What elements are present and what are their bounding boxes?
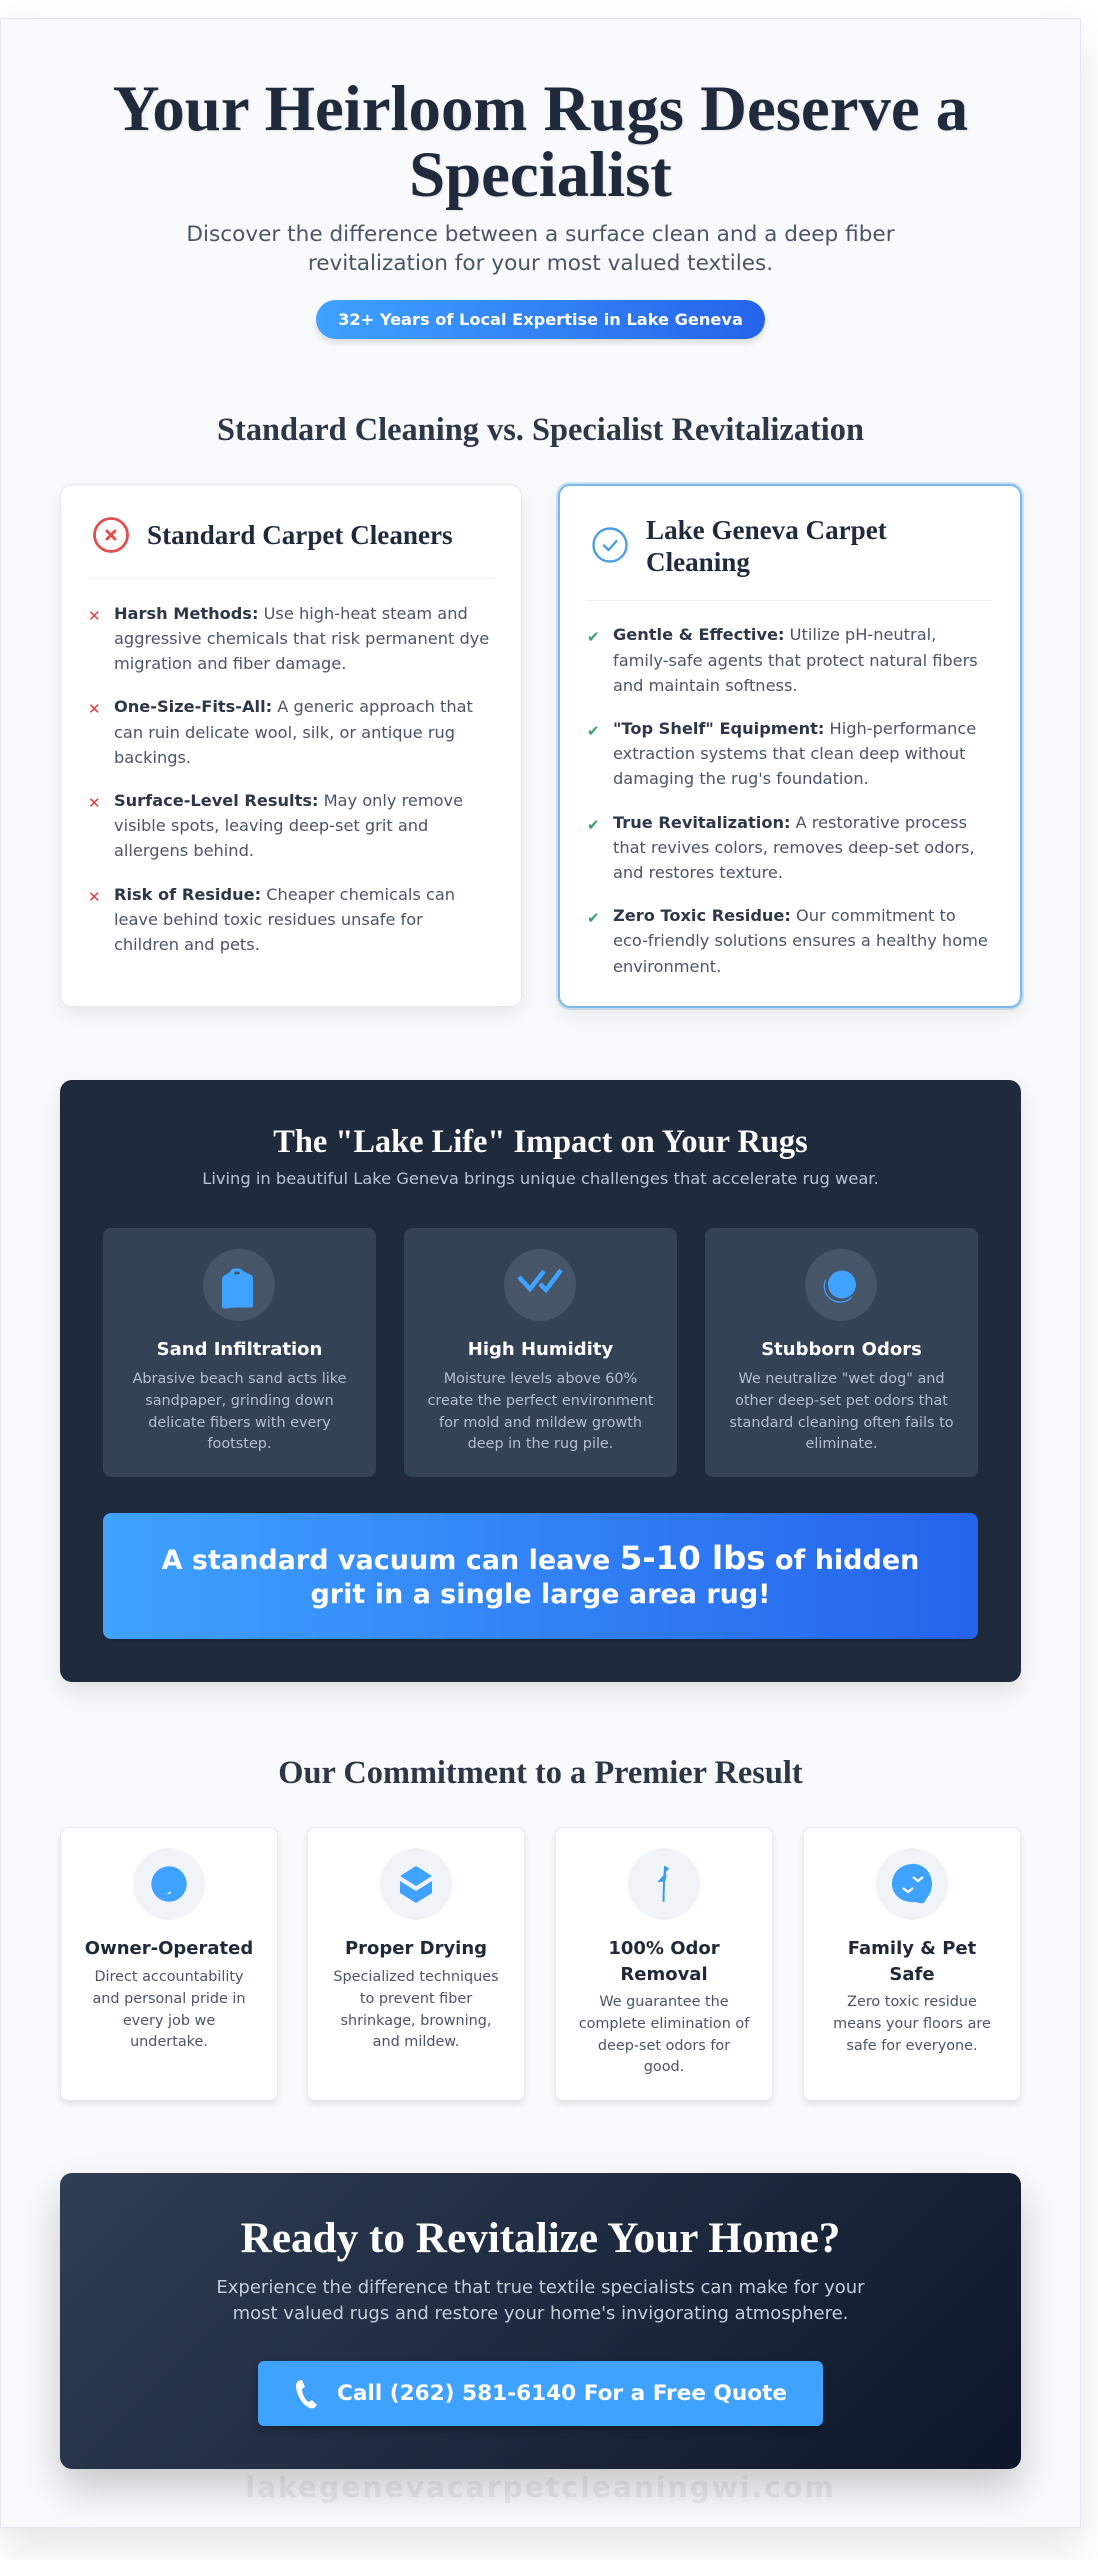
card text: Specialized techniques <box>333 1969 499 1985</box>
callout: hidden grit: grit in a single large area rug! <box>310 1579 770 1610</box>
card text <box>579 1994 750 2075</box>
item: top shelf equipment: extraction systems that clean deep without <box>613 744 966 763</box>
item: surface level results <box>88 791 463 860</box>
item: surface level results: allergens behind. <box>114 841 254 860</box>
item: surface level results: visible spots, leaving deep-set grit and <box>114 816 428 835</box>
card: proper drying <box>307 1827 525 2101</box>
title: Your Heirloom Rugs Deserve a <box>113 73 968 145</box>
badge: years of expertise: 32+ Years of Local Expertise in Lake Geneva <box>338 310 743 329</box>
card heading: Stubborn Odors <box>761 1339 922 1360</box>
card heading <box>608 1938 720 1985</box>
card text: and mildew. <box>373 2034 459 2050</box>
card text: We neutralize "wet dog" and <box>738 1371 945 1387</box>
item: gentle and effective: and maintain softness. <box>613 676 798 695</box>
card heading: Sand Infiltration <box>157 1339 322 1360</box>
card text: Moisture levels above 60% <box>444 1371 637 1387</box>
button: call <box>258 2361 823 2426</box>
icon: blue check circle <box>592 527 628 563</box>
item: harsh methods: aggressive chemicals that risk permanent dye <box>114 629 489 648</box>
card text: sandpaper, grinding down <box>145 1393 334 1409</box>
card text: other deep-set pet odors that <box>735 1393 948 1409</box>
card: owner operated <box>60 1827 278 2101</box>
card text <box>92 1969 246 2050</box>
watermark: website: lakegenevacarpetcleaningwi.com <box>245 2471 836 2504</box>
icon: phone <box>296 2380 317 2408</box>
item: harsh methods: ✕ <box>88 607 101 625</box>
icon: double check <box>504 1249 576 1321</box>
item: gentle and effective: family-safe agents that protect natural fibers <box>613 651 978 670</box>
cta text <box>216 2277 865 2324</box>
item: top shelf equipment: ✔ <box>587 722 600 740</box>
card: high humidity <box>404 1228 677 1477</box>
card text: complete elimination of <box>579 2016 749 2032</box>
panel: call to action <box>60 2173 1021 2469</box>
card text: for mold and mildew growth <box>439 1415 642 1431</box>
icon: odor swirl <box>805 1249 877 1321</box>
item: zero toxic residue: ✔ <box>587 909 600 927</box>
item: zero toxic residue: eco-friendly solutions ensures a healthy home <box>613 931 988 950</box>
card title: Lake Geneva Carpet <box>646 515 887 545</box>
card title: Cleaning <box>646 547 750 577</box>
icon: red x circle <box>93 517 129 553</box>
item: gentle and effective <box>587 625 978 695</box>
item: zero toxic residue <box>587 906 988 976</box>
card heading: 100% Odor <box>608 1938 720 1959</box>
title <box>113 73 968 212</box>
item: surface level results: ✕ <box>88 794 101 812</box>
card text <box>729 1371 954 1452</box>
item: zero toxic residue: environment. <box>613 957 721 976</box>
card text: Direct accountability <box>94 1969 244 1985</box>
card text: good. <box>644 2059 684 2075</box>
heading: comparison: Standard Cleaning vs. Specialist Revitalization <box>217 412 864 448</box>
card heading: Family & Pet <box>848 1938 976 1959</box>
card text <box>427 1371 654 1452</box>
cta heading: Ready to Revitalize Your Home? <box>241 2215 840 2262</box>
card heading <box>848 1938 976 1985</box>
subtitle: revitalization for your most valued textiles. <box>308 251 773 276</box>
card text <box>132 1371 346 1452</box>
icon: chat bubble <box>876 1848 948 1920</box>
card text: footstep. <box>207 1436 272 1452</box>
item: surface level results: Surface-Level Results: May only remove <box>114 791 463 810</box>
card text: Zero toxic residue <box>847 1994 977 2010</box>
card text: Abrasive beach sand acts like <box>133 1371 346 1387</box>
panel subheading: Living in beautiful Lake Geneva brings unique challenges that accelerate rug wear. <box>202 1169 879 1188</box>
icon: blue circle <box>133 1848 205 1920</box>
item: true revitalization <box>587 813 975 882</box>
card text <box>333 1969 499 2050</box>
heading: commitment: Our Commitment to a Premier Result <box>278 1755 803 1791</box>
card text: safe for everyone. <box>846 2038 978 2054</box>
icon: thin pin <box>628 1848 700 1920</box>
item: one size fits all: can ruin delicate wool, silk, or antique rug <box>114 723 455 742</box>
card text: delicate fibers with every <box>148 1415 331 1431</box>
item: top shelf equipment: "Top Shelf" Equipment: High-performance <box>613 719 976 738</box>
card title: Standard Carpet Cleaners <box>147 520 453 550</box>
subtitle: Discover the difference between a surface clean and a deep fiber <box>186 222 895 247</box>
item: top shelf equipment: damaging the rug's foundation. <box>613 769 869 788</box>
card: family and pet safe <box>803 1827 1021 2101</box>
cta text: most valued rugs and restore your home's invigorating atmosphere. <box>233 2303 848 2324</box>
card heading: Safe <box>889 1964 935 1985</box>
item: true revitalization: that revives colors, removes deep-set odors, <box>613 838 975 857</box>
item: risk of residue: Risk of Residue: Cheaper chemicals can <box>114 885 455 904</box>
item: risk of residue <box>88 885 455 954</box>
item: top shelf equipment <box>587 719 976 788</box>
card heading: Owner-Operated <box>85 1938 253 1959</box>
card text: shrinkage, browning, <box>341 2013 491 2029</box>
item: zero toxic residue: Zero Toxic Residue: Our commitment to <box>613 906 956 925</box>
card: sand infiltration <box>103 1228 376 1477</box>
item: harsh methods <box>88 604 489 673</box>
callout: hidden grit <box>103 1513 978 1639</box>
panel: lake geneva carpet cleaning <box>558 484 1022 1008</box>
item: gentle and effective: ✔ <box>587 628 600 646</box>
card text: eliminate. <box>806 1436 877 1452</box>
item: one size fits all: backings. <box>114 748 191 767</box>
badge: years of expertise <box>316 300 765 339</box>
card text: deep in the rug pile. <box>468 1436 613 1452</box>
callout: hidden grit: A standard vacuum can leave 5-10 lbs of hidden <box>162 1539 919 1577</box>
card: stubborn odors <box>705 1228 978 1477</box>
item: risk of residue: leave behind toxic residues unsafe for <box>114 910 423 929</box>
card text: We guarantee the <box>599 1994 729 2010</box>
panel: standard carpet cleaners <box>60 484 522 1007</box>
card text <box>833 1994 991 2054</box>
panel: lake life impact <box>60 1080 1021 1682</box>
item: risk of residue: ✕ <box>88 888 101 906</box>
item: gentle and effective: Gentle & Effective: Utilize pH-neutral, <box>613 625 936 644</box>
icon: sand bag <box>203 1249 275 1321</box>
card text: undertake. <box>130 2034 208 2050</box>
card heading: Proper Drying <box>345 1938 487 1959</box>
card heading: Removal <box>620 1964 708 1985</box>
item: true revitalization: True Revitalization: A restorative process <box>613 813 967 832</box>
subtitle <box>186 222 895 276</box>
card text: create the perfect environment <box>427 1393 654 1409</box>
card heading: High Humidity <box>468 1339 613 1360</box>
button text: Call (262) 581-6140 For a Free Quote <box>337 2381 787 2406</box>
panel heading: The "Lake Life" Impact on Your Rugs <box>273 1124 808 1160</box>
card text: means your floors are <box>833 2016 991 2032</box>
item: true revitalization: ✔ <box>587 816 600 834</box>
card text: standard cleaning often fails to <box>729 1415 954 1431</box>
item: true revitalization: and restores texture. <box>613 863 783 882</box>
item: harsh methods: migration and fiber damage. <box>114 654 346 673</box>
card: odor removal <box>555 1827 773 2101</box>
item: one size fits all: One-Size-Fits-All: A generic approach that <box>114 697 473 716</box>
item: risk of residue: children and pets. <box>114 935 260 954</box>
item: one size fits all <box>88 697 473 767</box>
icon: layered cube <box>380 1848 452 1920</box>
card title <box>646 515 887 577</box>
card text: to prevent fiber <box>360 1991 472 2007</box>
cta text: Experience the difference that true textile specialists can make for your <box>216 2277 865 2298</box>
item: one size fits all: ✕ <box>88 700 101 718</box>
title: Specialist <box>409 139 672 211</box>
card text: deep-set odors for <box>598 2038 730 2054</box>
item: harsh methods: Harsh Methods: Use high-heat steam and <box>114 604 468 623</box>
card text: and personal pride in <box>92 1991 246 2007</box>
card text: every job we <box>123 2013 215 2029</box>
